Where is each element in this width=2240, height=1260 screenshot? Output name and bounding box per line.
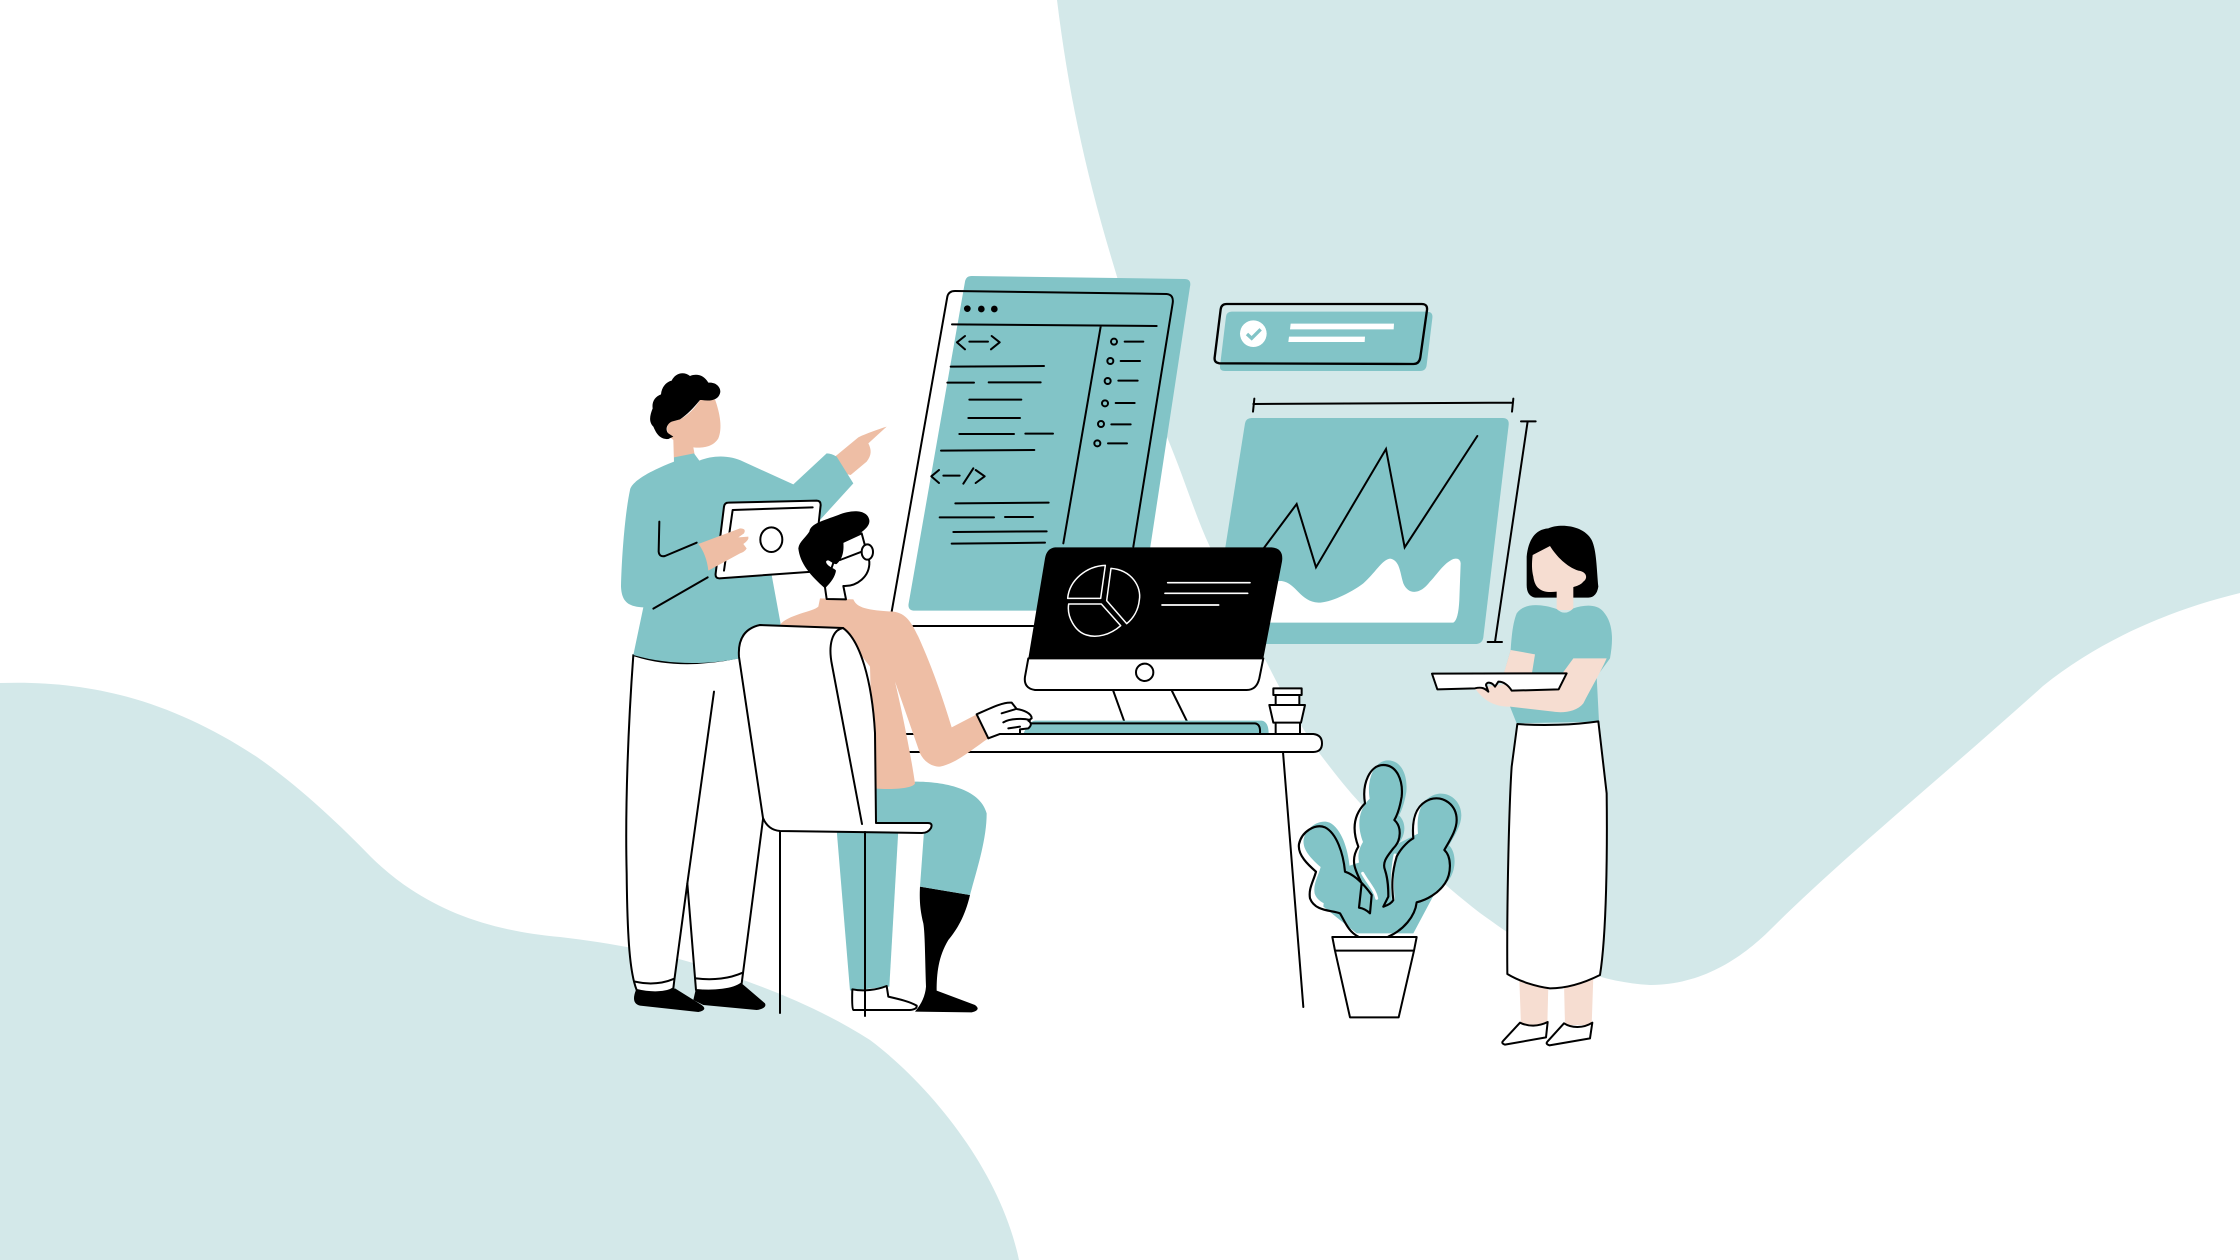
keyboard bbox=[1023, 721, 1269, 734]
monitor bbox=[1025, 547, 1282, 690]
chart and status card bbox=[1210, 304, 1536, 644]
pointing hand bbox=[835, 427, 887, 475]
code window outline bbox=[892, 291, 1173, 626]
tray bbox=[1432, 673, 1567, 692]
t-shirt bbox=[1504, 605, 1612, 723]
plant bbox=[1299, 760, 1461, 1017]
plant pot bbox=[1332, 937, 1417, 1017]
face and neck bbox=[825, 533, 869, 599]
code window teal panel bbox=[908, 276, 1190, 611]
line chart bbox=[1250, 436, 1477, 567]
curly hair bbox=[650, 373, 720, 439]
head and neck bbox=[667, 399, 721, 463]
standing man bbox=[621, 373, 887, 1012]
seated man: legs bbox=[837, 782, 987, 1012]
coffee cups bbox=[1269, 688, 1305, 734]
chair legs bbox=[780, 832, 865, 1016]
far arm bbox=[1503, 650, 1535, 675]
hair bbox=[798, 511, 869, 588]
dimension line: width bbox=[1253, 399, 1513, 412]
skirt bbox=[1507, 721, 1607, 988]
window control dots bbox=[964, 305, 998, 312]
area chart bbox=[1250, 559, 1461, 623]
pie chart on screen bbox=[1068, 565, 1140, 636]
near arm bbox=[1475, 658, 1607, 712]
background blob: bottom left bbox=[0, 683, 1019, 1260]
shoes bbox=[1502, 1022, 1592, 1045]
chair back fold bbox=[830, 628, 862, 824]
plant foliage bbox=[1299, 760, 1461, 937]
woman: skirt and feet bbox=[1502, 721, 1607, 1045]
dimension line: height bbox=[1488, 421, 1536, 642]
desk top bbox=[900, 734, 1322, 752]
hair bbox=[1527, 526, 1598, 598]
background blob: top right bbox=[1057, 0, 2240, 985]
chart panel bbox=[1210, 418, 1509, 644]
sleeve fold lines bbox=[653, 522, 708, 609]
woman: upper body bbox=[1432, 526, 1612, 723]
hand on keyboard bbox=[977, 703, 1032, 738]
sidebar list bbox=[1094, 339, 1143, 446]
text lines on screen bbox=[1162, 583, 1250, 605]
monitor stand bbox=[1113, 691, 1187, 721]
sweater bbox=[621, 453, 853, 663]
legs bbox=[1519, 977, 1593, 1025]
code lines bbox=[931, 336, 1053, 544]
status card bbox=[1215, 304, 1432, 371]
seated man bbox=[780, 511, 1032, 1012]
sweater bbox=[780, 598, 988, 789]
hand holding tablet bbox=[698, 528, 748, 571]
chair shell bbox=[739, 625, 932, 833]
standing man: upper body bbox=[621, 373, 887, 663]
desk and computer bbox=[900, 547, 1322, 1007]
glasses bbox=[840, 544, 873, 560]
code window bbox=[892, 276, 1190, 626]
standing man: trousers and shoes bbox=[626, 655, 765, 1012]
tablet bbox=[716, 501, 821, 578]
desk leg bbox=[1283, 752, 1303, 1007]
office chair bbox=[739, 625, 932, 1016]
face and neck bbox=[1532, 546, 1586, 610]
seated man: torso, head and arm bbox=[780, 511, 1032, 789]
standing woman bbox=[1432, 526, 1612, 1045]
